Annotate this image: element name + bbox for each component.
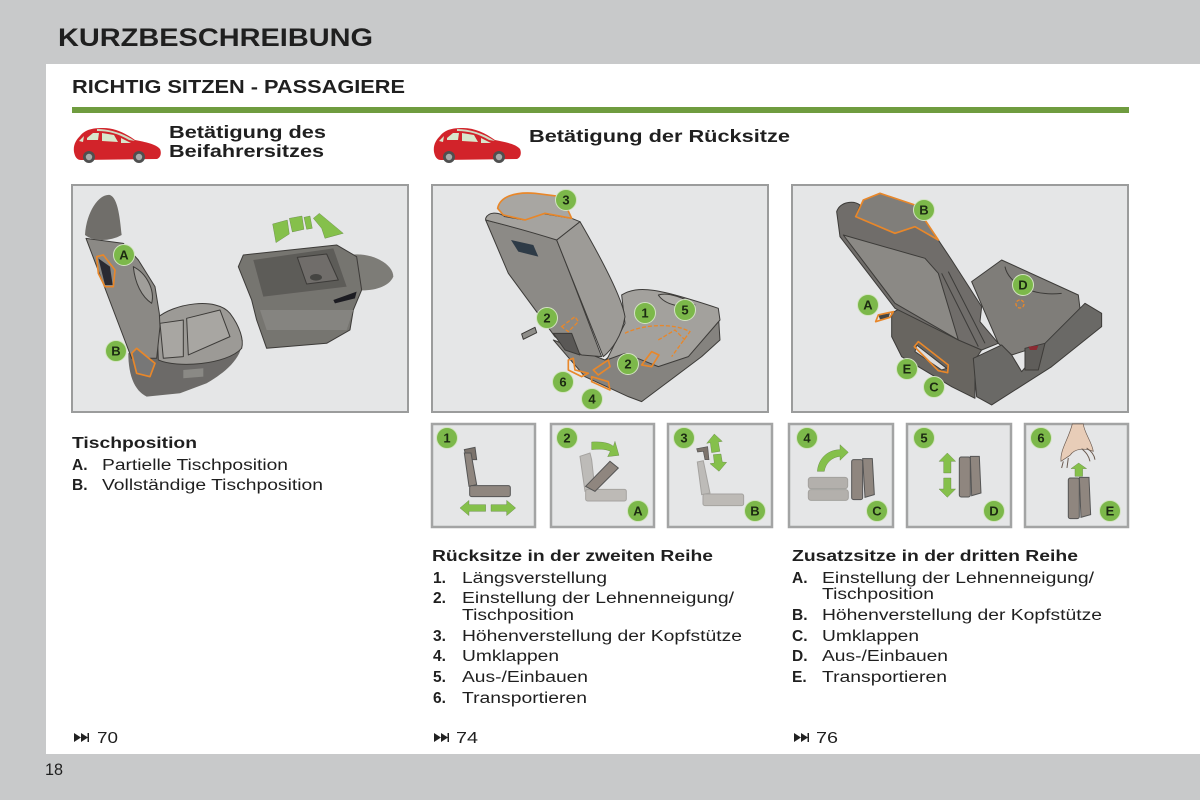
- icon: red car front passenger: [74, 128, 161, 163]
- badge 3: [556, 190, 576, 210]
- badge 2 lower: [618, 354, 638, 374]
- page reference 74: [434, 730, 478, 747]
- badge 6: [552, 372, 574, 392]
- badge 5: 5: [681, 302, 689, 318]
- page number: 18: [45, 760, 63, 779]
- badge C: [924, 376, 944, 398]
- text block: third row seats: Zusatzsitze in der dritten Reihe: [792, 548, 1078, 565]
- badge B: [106, 340, 126, 362]
- badge C: C: [929, 380, 939, 394]
- badge 4: [582, 388, 602, 410]
- section heading: RICHTIG SITZEN - PASSAGIERE: [72, 77, 405, 97]
- badge E: E: [1106, 504, 1115, 518]
- page reference 70: [74, 730, 118, 747]
- text block: table position: Vollständige Tischposition: [102, 477, 323, 494]
- badge 2 upper: 2: [543, 310, 551, 326]
- text block: table position: [72, 435, 323, 494]
- badge D: D: [989, 504, 999, 518]
- badge A: A: [863, 298, 873, 312]
- badge B: B: [750, 504, 760, 518]
- thumbnail 6: transport: [1025, 424, 1128, 527]
- badge 2 upper: [536, 308, 558, 328]
- badge A: [858, 294, 878, 316]
- text block: third row seats: A.: [792, 570, 808, 587]
- seat in upright position: [85, 195, 243, 397]
- icon: green arrow: [273, 213, 343, 243]
- text block: third row seats: Umklappen: [822, 628, 919, 645]
- thumbnail 5: remove and install: [907, 424, 1011, 527]
- text block: second row seats: Einstellung der Lehnenneigung/: [462, 590, 735, 607]
- text block: second row seats: 2.: [433, 590, 446, 607]
- text block: table position: Partielle Tischposition: [102, 457, 288, 474]
- badge B: B: [919, 202, 929, 218]
- panel: rear seat second row: [432, 185, 768, 412]
- text block: third row seats: B.: [792, 607, 808, 624]
- text block: second row seats: Längsverstellung: [462, 570, 607, 587]
- text block: table position: Tischposition: [72, 435, 197, 452]
- text block: third row seats: D.: [792, 648, 808, 665]
- text block: second row seats: 1.: [433, 570, 446, 587]
- heading: passenger seat: [169, 122, 326, 161]
- thumbnail 2: backrest tilt: [551, 424, 654, 527]
- text block: second row seats: 5.: [433, 669, 446, 686]
- page reference 76: [794, 730, 838, 747]
- badge C: C: [872, 504, 882, 518]
- title: KURZBESCHREIBUNG: [58, 24, 373, 52]
- text block: third row seats: Höhenverstellung der Kopfstütze: [822, 607, 1102, 624]
- heading: passenger seat: Betätigung des: [169, 122, 326, 142]
- badge 6: 6: [1037, 430, 1045, 446]
- icon: red car rear seats: [434, 128, 521, 163]
- seat folded table position: [238, 245, 393, 348]
- badge 5: [674, 300, 696, 320]
- text block: second row seats: Umklappen: [462, 648, 559, 665]
- badge A: A: [633, 504, 643, 518]
- badge B: B: [111, 344, 121, 358]
- text block: table position: B.: [72, 477, 88, 494]
- green divider bar: [72, 107, 1129, 113]
- text block: second row seats: 3.: [433, 628, 446, 645]
- badge 1: [634, 302, 656, 324]
- badge 2: 2: [563, 430, 571, 446]
- badge 3: 3: [562, 192, 570, 208]
- text block: third row seats: E.: [792, 669, 807, 686]
- badge A: [114, 244, 134, 266]
- panel: rear seat third row: [792, 185, 1128, 412]
- badge 6: 6: [559, 374, 567, 390]
- badge A: A: [119, 248, 129, 262]
- heading: passenger seat: Beifahrersitzes: [169, 141, 324, 161]
- text block: third row seats: Tischposition: [822, 586, 934, 603]
- badge 5: 5: [920, 430, 928, 446]
- thumbnail 1: longitudinal adjustment: [432, 424, 535, 527]
- badge 4: 4: [803, 430, 811, 446]
- text block: second row seats: 6.: [433, 690, 446, 707]
- text block: second row seats: 4.: [433, 648, 446, 665]
- text block: table position: A.: [72, 457, 88, 474]
- badge 2 lower: 2: [624, 356, 632, 372]
- badge 3: 3: [680, 430, 688, 446]
- text block: second row seats: Aus-/Einbauen: [462, 669, 588, 686]
- badge 1: 1: [641, 306, 649, 320]
- text block: third row seats: [792, 548, 1102, 686]
- badge D: [1012, 274, 1034, 296]
- text block: third row seats: Aus-/Einbauen: [822, 648, 948, 665]
- badge 4: 4: [588, 392, 596, 406]
- text block: third row seats: Transportieren: [822, 669, 947, 686]
- panel: passenger seat illustration: [72, 185, 408, 412]
- thumbnail 4: fold: [789, 424, 893, 527]
- page reference 74: 74: [456, 730, 478, 747]
- page reference 76: 76: [816, 730, 838, 747]
- page reference 70: 70: [97, 730, 118, 747]
- badge D: D: [1018, 278, 1028, 292]
- text block: third row seats: Einstellung der Lehnenneigung/: [822, 570, 1095, 587]
- text block: third row seats: C.: [792, 628, 808, 645]
- text block: second row seats: [432, 548, 742, 707]
- text block: second row seats: Tischposition: [462, 607, 574, 624]
- badge B: [914, 200, 934, 220]
- text block: second row seats: Rücksitze in der zweiten Reihe: [432, 548, 713, 565]
- text block: second row seats: Transportieren: [462, 690, 587, 707]
- badge 1: 1: [443, 430, 451, 446]
- thumbnail 3: headrest height: [668, 424, 772, 527]
- badge E: [896, 358, 918, 380]
- text block: second row seats: Höhenverstellung der Kopfstütze: [462, 628, 742, 645]
- badge E: E: [903, 362, 912, 376]
- heading: rear seats: Betätigung der Rücksitze: [529, 126, 790, 146]
